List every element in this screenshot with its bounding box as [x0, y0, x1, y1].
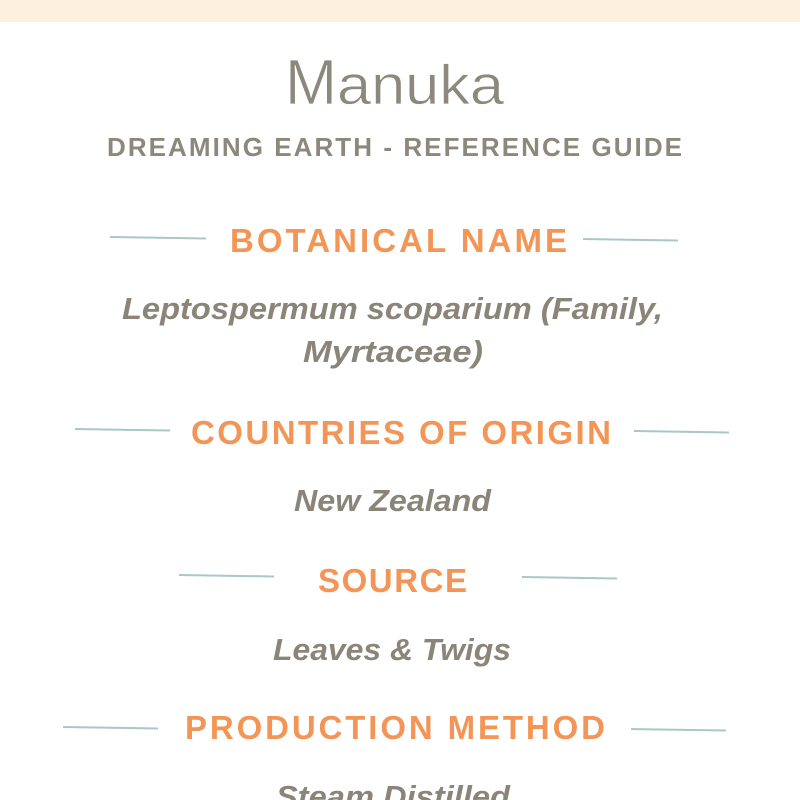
title: [285, 46, 505, 118]
section: countries of origin: [75, 414, 729, 518]
text: countries value: New Zealand: [294, 483, 492, 518]
text: botanical name value: Myrtaceae): [303, 334, 483, 369]
text: source value: Leaves & Twigs: [273, 632, 511, 667]
text: botanical name value: Leptospermum scoparium (Family,: [122, 291, 663, 326]
heading: countries of origin: COUNTRIES OF ORIGIN: [191, 414, 611, 451]
section: source: [179, 562, 617, 667]
subtitle: DREAMING EARTH - REFERENCE GUIDE: [107, 132, 682, 162]
top banner: [0, 0, 800, 22]
text: botanical name value: [122, 291, 663, 369]
heading: botanical name: BOTANICAL NAME: [230, 222, 567, 259]
section: botanical name: [110, 222, 678, 369]
heading: production method: PRODUCTION METHOD: [185, 709, 605, 746]
title: M: [285, 46, 337, 118]
title: anuka: [337, 53, 505, 116]
section: production method: [63, 709, 726, 800]
heading: source: SOURCE: [318, 562, 467, 599]
